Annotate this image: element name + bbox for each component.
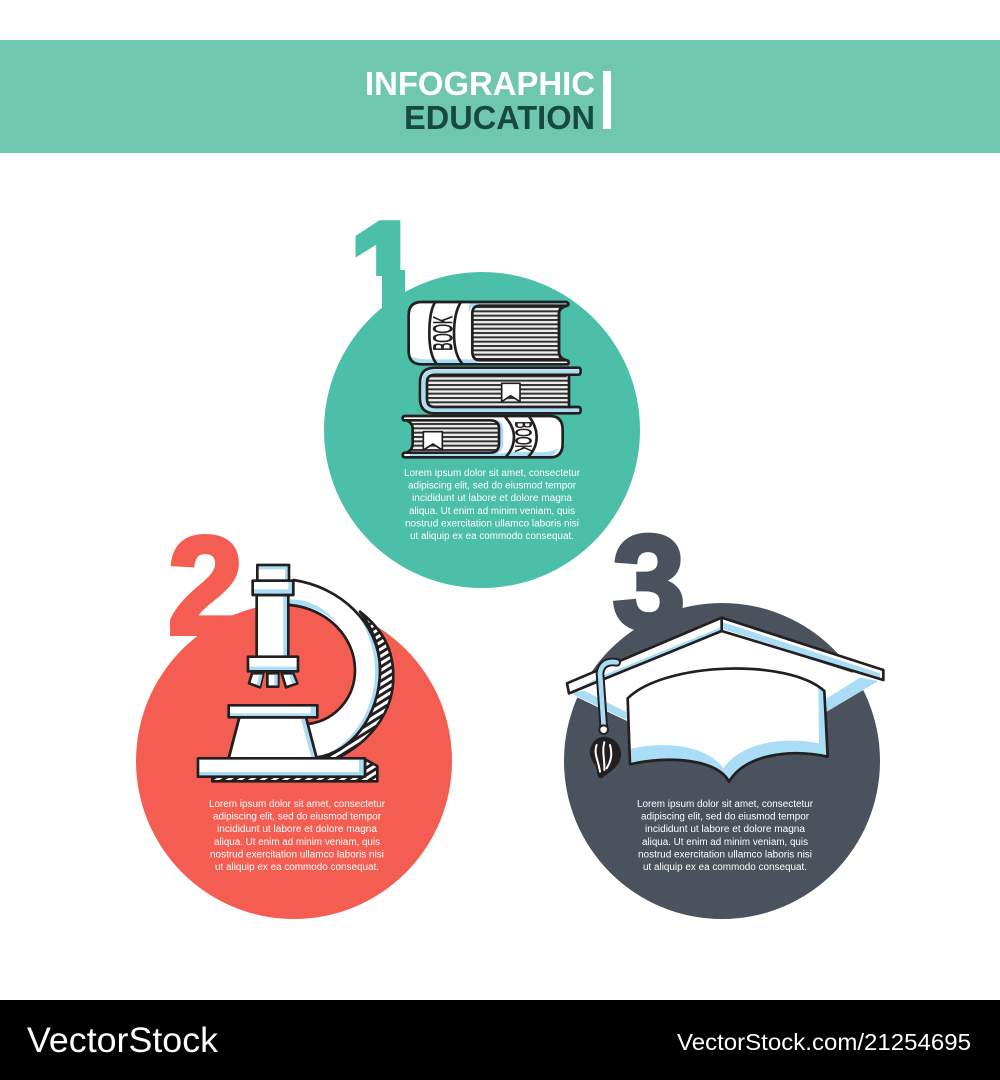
panel: circle 2 xyxy=(136,603,452,919)
text: panel 1 description: adipiscing elit, sed do eiusmod tempor xyxy=(408,481,577,492)
title: INFOGRAPHIC xyxy=(365,66,595,103)
text: panel 1 description: aliqua. Ut enim ad minim veniam, quis xyxy=(409,506,575,517)
panel: circle 1 xyxy=(324,272,640,588)
text: panel 3 description: adipiscing elit, sed do eiusmod tempor xyxy=(641,812,810,823)
text: panel 2 description: nostrud exercitation ullamco laboris nisi xyxy=(210,849,384,860)
text: panel 1 description: ut aliquip ex ea commodo consequat. xyxy=(410,531,574,542)
text: panel 3 description: incididunt ut labore et dolore magna xyxy=(645,824,805,835)
title xyxy=(365,66,611,137)
panel: circle 3 xyxy=(564,603,880,919)
text: panel 1 description xyxy=(404,468,581,542)
text: panel 3 description: nostrud exercitation ullamco laboris nisi xyxy=(638,849,812,860)
text: panel 3 description xyxy=(637,799,814,873)
step number 2: 2 xyxy=(168,508,243,664)
text: panel 1 description: nostrud exercitation ullamco laboris nisi xyxy=(405,518,579,529)
icon: stack of books: BOOK xyxy=(510,421,536,452)
text: panel 2 description: incididunt ut labore et dolore magna xyxy=(217,824,377,835)
footer bar xyxy=(0,1000,1000,1080)
footer brand: VectorStock xyxy=(27,1021,219,1060)
text: panel 3 description: Lorem ipsum dolor sit amet, consectetur xyxy=(637,799,814,810)
text: panel 2 description: aliqua. Ut enim ad minim veniam, quis xyxy=(214,837,380,848)
step number 3: 3 xyxy=(613,509,685,657)
text: panel 3 description: ut aliquip ex ea commodo consequat. xyxy=(643,862,807,873)
text: panel 2 description: Lorem ipsum dolor sit amet, consectetur xyxy=(209,799,386,810)
icon: microscope xyxy=(198,565,393,781)
icon: stack of books: BOOK xyxy=(428,316,458,351)
text: panel 1 description: incididunt ut labore et dolore magna xyxy=(412,493,572,504)
text: panel 2 description xyxy=(209,799,386,873)
header band xyxy=(0,40,1000,153)
text: panel 3 description: aliqua. Ut enim ad minim veniam, quis xyxy=(642,837,808,848)
icon: graduation cap xyxy=(567,618,883,782)
footer image id: VectorStock.com/21254695 xyxy=(677,1029,971,1055)
icon: stack of books xyxy=(403,302,581,457)
title: EDUCATION xyxy=(404,100,595,137)
text: panel 2 description: ut aliquip ex ea commodo consequat. xyxy=(215,862,379,873)
text: panel 1 description: Lorem ipsum dolor sit amet, consectetur xyxy=(404,468,581,479)
text: panel 2 description: adipiscing elit, sed do eiusmod tempor xyxy=(213,812,382,823)
step number 1 xyxy=(356,220,405,308)
step number 1: 1 xyxy=(350,198,420,337)
